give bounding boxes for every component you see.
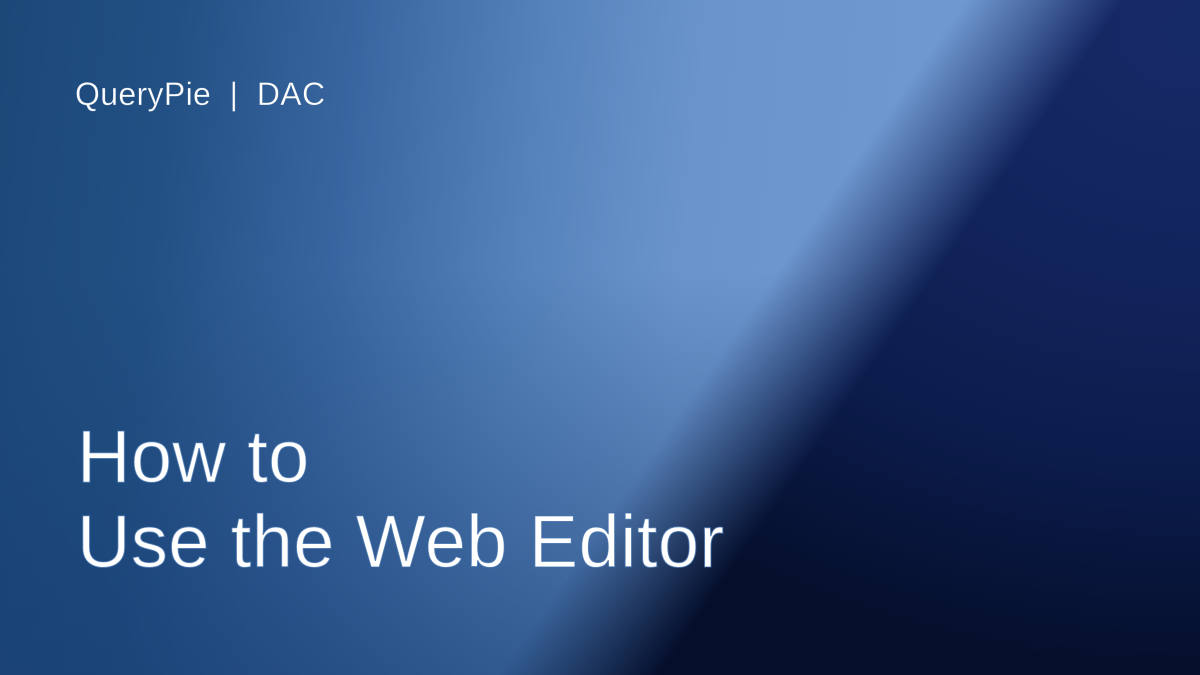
background: dark navy diagonal <box>514 0 1200 675</box>
title <box>77 415 724 583</box>
title: Use the Web Editor <box>77 500 724 583</box>
title: How to <box>77 415 310 498</box>
brand label: QueryPie | DAC <box>75 76 325 112</box>
